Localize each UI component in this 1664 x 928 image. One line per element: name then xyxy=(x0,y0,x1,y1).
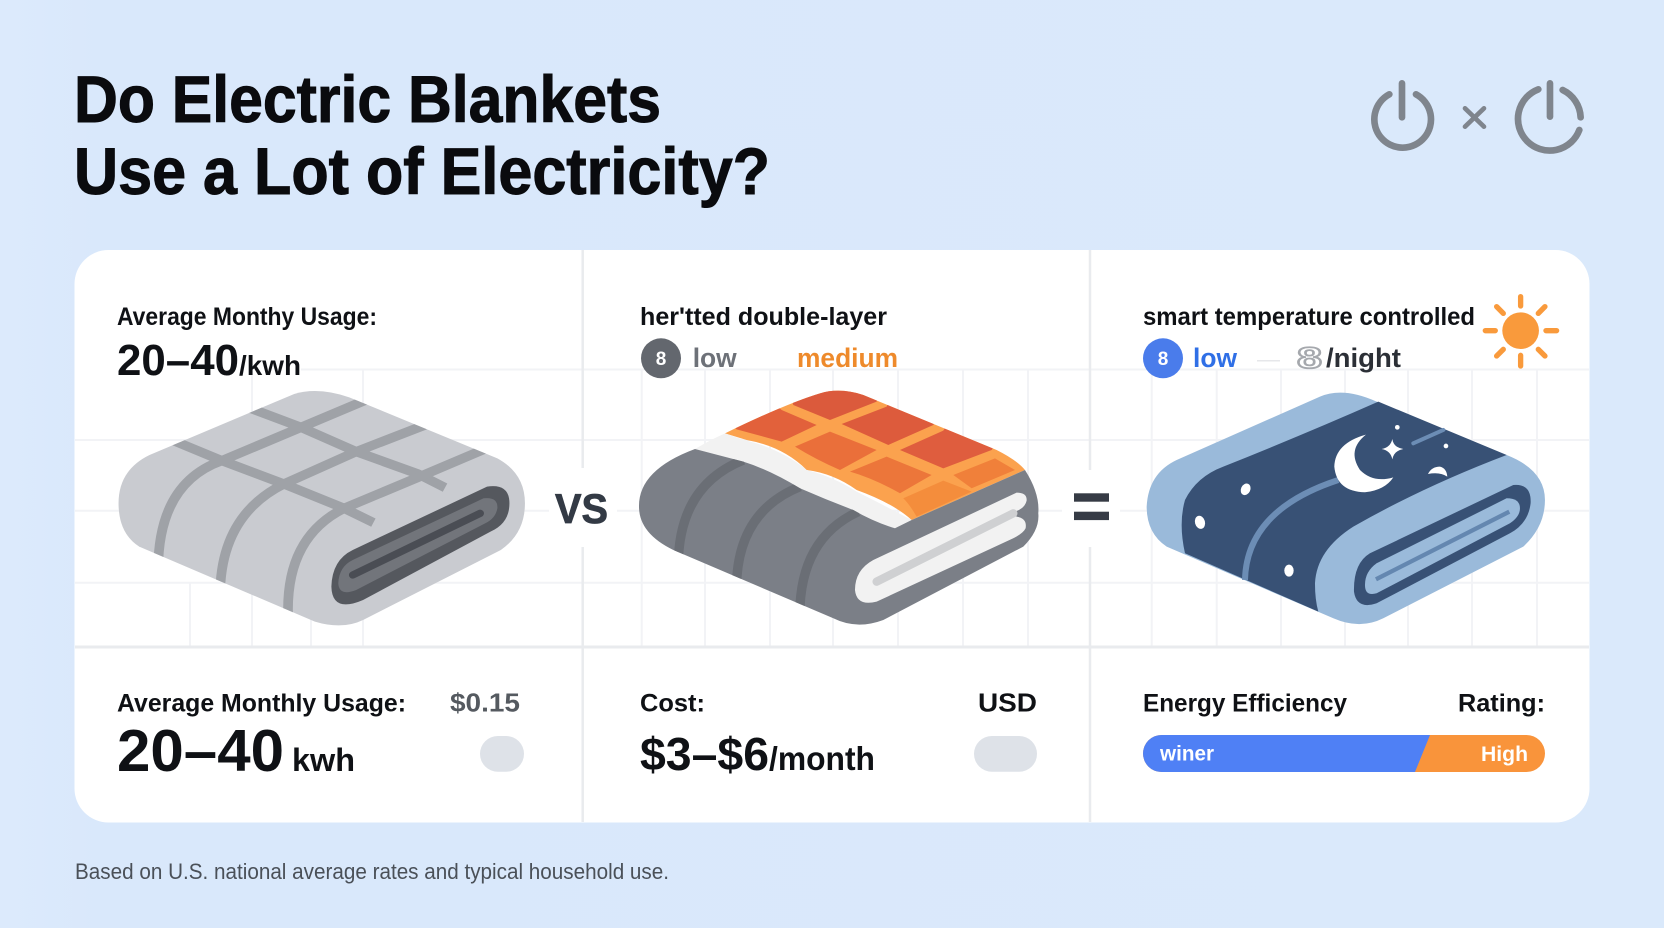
stat: energy efficiency rating xyxy=(1143,690,1545,772)
icon: grey blanket xyxy=(119,391,525,630)
vs label: VS xyxy=(555,485,608,532)
panel 2 header: heated double-layer xyxy=(640,303,898,378)
panel 2 header: heated double-layer: her'tted double-layer xyxy=(640,303,887,331)
stat: energy efficiency rating: Energy Efficiency xyxy=(1143,690,1347,718)
panel 3 header: smart temperature controlled: low xyxy=(1193,343,1238,373)
efficiency bar xyxy=(1143,735,1545,772)
stat: energy efficiency rating: Rating: xyxy=(1458,690,1545,718)
stat: average monthly usage xyxy=(117,688,524,784)
stat: average monthly usage: Average Monthly Usage: xyxy=(117,690,406,718)
stat: average monthly usage: $0.15 xyxy=(450,688,520,718)
panel: comparison card xyxy=(74,250,1590,822)
title: Do Electric Blankets xyxy=(74,62,661,136)
infographic canvas xyxy=(74,74,1590,884)
icon: power symbols xyxy=(1374,83,1581,151)
panel 1 header: standard blanket usage: 20–40 xyxy=(117,336,239,385)
equals sign xyxy=(1074,493,1109,520)
stat: cost: /month xyxy=(769,740,875,777)
panel 3 header: smart temperature controlled: smart temperature controlled xyxy=(1143,303,1475,331)
stat: cost xyxy=(640,688,1037,780)
icon: sun xyxy=(1485,297,1557,366)
footnote: Based on U.S. national average rates and typical household use. xyxy=(75,859,669,884)
panel 2 header: heated double-layer: 8 xyxy=(656,349,666,370)
panel 3 header: smart temperature controlled: 8 xyxy=(1158,349,1168,370)
title xyxy=(74,62,770,208)
title: Use a Lot of Electricity? xyxy=(74,134,770,208)
panel 1 header: standard blanket usage: Average Monthy Usage: xyxy=(117,303,377,331)
panel 2 header: heated double-layer: low xyxy=(693,343,738,373)
icon: heated double-layer blanket xyxy=(639,383,1038,625)
stat: cost: USD xyxy=(978,688,1037,718)
icon: night blue blanket xyxy=(1147,393,1545,624)
efficiency bar: High xyxy=(1481,743,1528,766)
panel 3 header: smart temperature controlled: 8 xyxy=(1297,342,1322,375)
panel 1 header: standard blanket usage: /kwh xyxy=(239,350,301,381)
stat: cost: Cost: xyxy=(640,690,705,718)
panel 1 header: standard blanket usage xyxy=(117,303,377,385)
stat: average monthly usage: kwh xyxy=(292,742,355,778)
panel 2 header: heated double-layer: medium xyxy=(797,343,898,373)
stat: average monthly usage: 20–40 xyxy=(117,718,284,784)
efficiency bar: winer xyxy=(1159,743,1214,766)
panel 3 header: smart temperature controlled: /night xyxy=(1326,343,1401,373)
stat: cost: $3–$6 xyxy=(640,728,769,780)
panel 3 header: smart temperature controlled xyxy=(1143,303,1475,378)
